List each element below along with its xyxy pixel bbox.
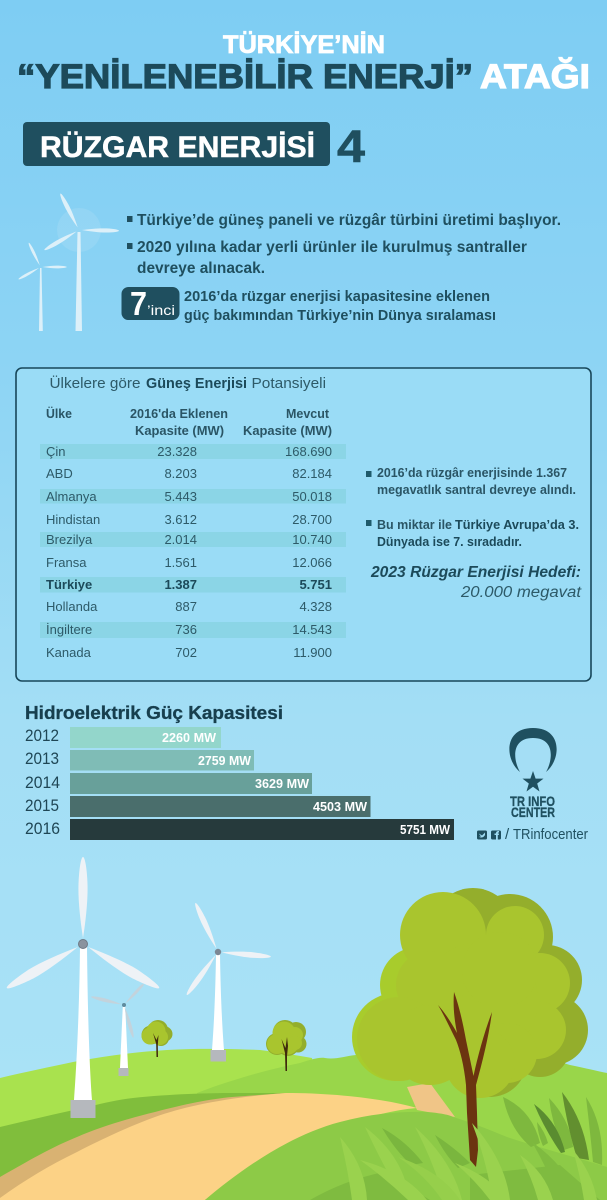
front hill (205, 1112, 607, 1200)
icon: two wind turbines (18, 193, 119, 331)
bar values (162, 731, 450, 837)
table rows: 4.328 (299, 599, 332, 614)
back hill (0, 1049, 320, 1200)
section heading: Rüzgar Enerjisi 4: 4 (337, 121, 365, 172)
table heading: Güneş Enerjisi (146, 375, 247, 392)
table column headers: Kapasite (MW) (135, 424, 224, 438)
table rows: ABD (46, 466, 73, 481)
year labels: 2015 (25, 796, 59, 815)
table rows: Hollanda (46, 599, 98, 614)
year labels: 2014 (25, 773, 60, 792)
table rows: Almanya (46, 489, 97, 504)
bar values: 5751 MW (400, 823, 450, 837)
title: ATAĞI (480, 58, 590, 96)
callout: 7th place (122, 285, 496, 324)
wind energy target: 2023 Rüzgar Enerjisi Hedefi: (370, 564, 581, 581)
table heading: Ülkelere göre (50, 374, 140, 392)
bar chart: hydroelectric capacity (25, 703, 454, 840)
table rows: 28.700 (292, 512, 332, 527)
table column headers (46, 406, 332, 438)
crown main lobes (357, 892, 570, 1098)
table rows: Kanada (46, 645, 92, 660)
table rows: 702 (175, 645, 197, 660)
table rows: 23.328 (157, 444, 197, 459)
table row bands (40, 444, 346, 638)
wind energy target: 20.000 megavat (460, 584, 582, 601)
table rows: 887 (175, 599, 197, 614)
chart heading: Hidroelektrik Güç Kapasitesi (25, 703, 283, 723)
table rows: Türkiye (46, 577, 92, 592)
callout: 7th place: 7 (130, 285, 147, 322)
back grass (503, 1092, 602, 1165)
logo: TR Info Center (477, 728, 588, 843)
bar values: 2759 MW (198, 754, 251, 768)
year labels: 2016 (25, 819, 60, 838)
side notes: megavatlık santral devreye alındı. (377, 483, 576, 497)
table rows: 12.066 (292, 555, 332, 570)
table rows: 736 (175, 622, 197, 637)
table column headers: 2016'da Eklenen (130, 407, 228, 421)
table rows: 168.690 (285, 444, 332, 459)
table rows: 82.184 (292, 466, 332, 481)
table rows: 1.561 (164, 555, 197, 570)
illustration: landscape (0, 857, 607, 1200)
table rows: İngiltere (46, 622, 92, 637)
table rows: Fransa (46, 555, 87, 570)
bullet list: production plans: Türkiye’de güneş paneli ve rüzgâr türbini üretimi başlıyor. (137, 212, 561, 229)
bullet list: production plans (127, 212, 561, 277)
table heading (50, 374, 326, 392)
small tree right (266, 1020, 306, 1071)
dark foreground hill (0, 1093, 290, 1200)
section heading: Rüzgar Enerjisi 4 (23, 121, 365, 172)
logo: TR Info Center: TR INFO (510, 793, 555, 809)
title: TÜRKİYE’NİN (223, 30, 385, 59)
table column headers: Mevcut (286, 407, 330, 421)
road (0, 1083, 455, 1200)
table column headers: Ülke (46, 406, 72, 421)
crown shadow lobes (431, 888, 588, 1097)
front grass (310, 1123, 600, 1200)
table rows: 11.900 (293, 645, 332, 660)
bar values: 3629 MW (255, 777, 309, 791)
bars (70, 727, 221, 748)
side notes: Dünyada ise 7. sıradadır. (377, 535, 522, 549)
callout: 7th place: ’inci (147, 302, 175, 318)
table heading: Potansiyeli (252, 375, 326, 392)
year labels (25, 726, 60, 838)
year labels: 2012 (25, 726, 59, 745)
bar values: 2260 MW (162, 731, 216, 745)
bullet list: production plans: devreye alınacak. (137, 260, 265, 277)
side notes: Türkiye Avrupa’da 3. (455, 518, 579, 532)
table rows: Brezilya (46, 532, 93, 547)
turbine: front (4, 857, 162, 1118)
turbine: rear (91, 983, 145, 1076)
table rows: 8.203 (164, 466, 197, 481)
side notes: Bu miktar ile (377, 518, 452, 532)
table rows: 50.018 (292, 489, 332, 504)
large tree trunk (438, 992, 492, 1167)
side notes: 2016’da rüzgâr enerjisinde 1.367 (377, 466, 567, 480)
table rows: 10.740 (292, 532, 332, 547)
table rows: 5.751 (299, 577, 332, 592)
bullet list: production plans: 2020 yılına kadar yerli ürünler ile kurulmuş santraller (137, 239, 527, 256)
social icons and handle (477, 826, 588, 843)
wind energy target (370, 564, 582, 601)
panel: capacity by country (16, 368, 591, 681)
side notes (366, 466, 579, 549)
table rows: 3.612 (164, 512, 197, 527)
table rows: Hindistan (46, 512, 100, 527)
section heading: Rüzgar Enerjisi 4: RÜZGAR ENERJİSİ (40, 131, 315, 164)
title (17, 30, 590, 96)
table rows: 1.387 (164, 577, 197, 592)
middle hill (197, 1050, 607, 1200)
small tree left (142, 1020, 172, 1057)
callout: 7th place: güç bakımından Türkiye’nin Dünya sıralaması (184, 308, 496, 324)
table rows: 14.543 (292, 622, 332, 637)
callout: 7th place: 2016’da rüzgar enerjisi kapasitesine eklenen (184, 289, 490, 305)
logo: TR Info Center: CENTER (511, 804, 555, 820)
year labels: 2013 (25, 749, 59, 768)
table rows: Çin (46, 444, 66, 459)
table rows: 5.443 (164, 489, 197, 504)
table rows: 2.014 (164, 532, 197, 547)
turbine: middle (185, 902, 271, 1062)
table column headers: Kapasite (MW) (243, 424, 332, 438)
table rows (46, 444, 332, 660)
crown bright lobes (352, 947, 456, 1081)
large tree crown (352, 888, 588, 1098)
icon: crescent and star (509, 728, 557, 792)
social icons and handle: TRinfocenter (513, 826, 588, 843)
social icons and handle: / (505, 826, 510, 843)
title: “YENİLENEBİLİR ENERJİ” (17, 58, 473, 96)
bar values: 4503 MW (313, 800, 367, 814)
